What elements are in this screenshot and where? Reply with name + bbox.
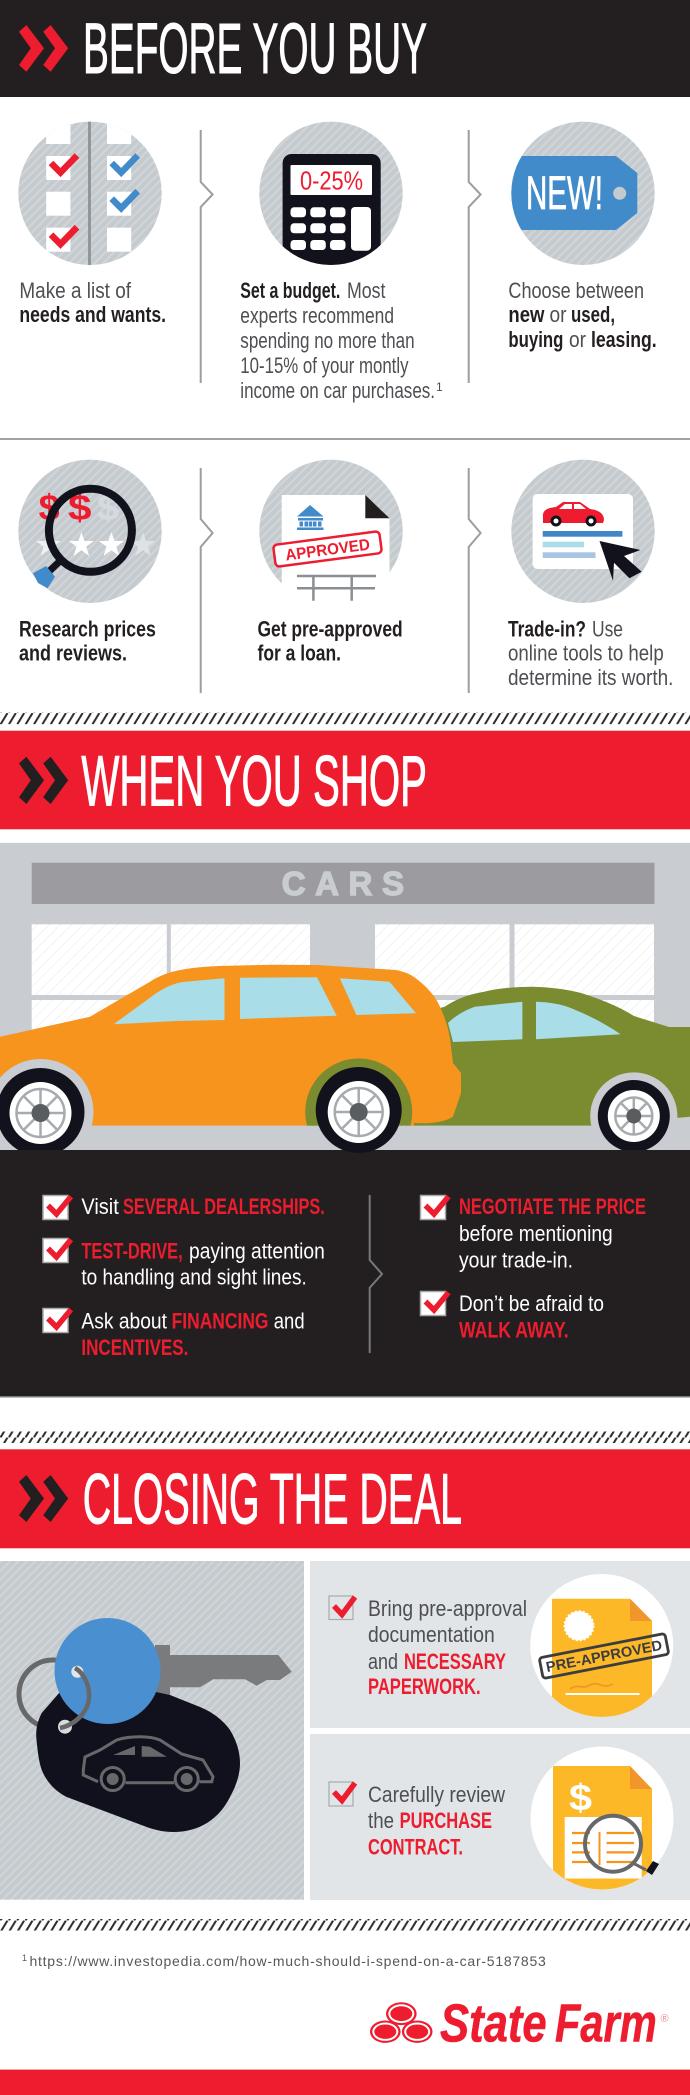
logo: state farm: Farm [555,1994,657,2054]
icon: magnifier with prices and stars: $ [68,487,92,528]
text: research prices: and reviews. [19,641,127,666]
icon: contract under magnifier [530,1746,674,1895]
text: set a budget: 1 [436,380,443,394]
text: make a list: Make a list of [19,278,132,303]
icon: key blade [155,1645,292,1697]
arrow divider 5 [370,1195,382,1353]
text: bring pre-approval: Bring pre-approval [368,1596,527,1621]
text: research prices: Research prices [19,617,156,642]
section header: before you buy [0,0,690,97]
logo: state farm: ® [660,2013,669,2025]
title: when you shop: WHEN YOU SHOP [81,742,427,822]
panel: set a budget [240,122,443,403]
text: carefully review [368,1782,505,1860]
text: set a budget: spending no more than [240,328,415,353]
icon: car outline on fob [83,1737,213,1790]
illustration: car dealership [0,843,690,1166]
panel: pre-approval documentation [310,1561,690,1728]
orange car [0,965,461,1126]
icon: pre-approved document [530,1574,673,1720]
logo: state farm [370,1994,669,2054]
text: trade-in [508,617,673,690]
green car [400,987,690,1126]
check: several dealerships: SEVERAL DEALERSHIPS. [123,1194,325,1219]
icon: pre-approved document: PRE-APPROVED [545,1638,664,1676]
check: walk away [420,1291,604,1343]
check: test-drive: paying attention [189,1238,325,1263]
panel: shopping checklist [0,1150,690,1398]
icon: online listing with cursor [511,460,655,603]
check: test-drive: to handling and sight lines. [81,1264,307,1289]
text: set a budget: Set a budget. [240,278,340,303]
text: pre-approved [258,617,403,666]
stamp: approved: APPROVED [284,537,371,564]
icon: red chevrons [19,25,68,72]
check: financing: FINANCING [172,1308,268,1333]
text: bring pre-approval: PAPERWORK. [368,1674,481,1699]
check: test-drive: TEST-DRIVE, [81,1238,183,1263]
text: carefully review: the [368,1808,394,1833]
icon: split ring back [19,1660,87,1728]
check: financing: Ask about [81,1308,167,1333]
text: choose: used, [571,302,615,327]
check: walk away: WALK AWAY. [459,1318,569,1343]
footer band [0,2070,690,2095]
text: choose: or [550,302,566,327]
icon: magnifier with prices and stars [18,460,162,603]
arrow divider 4 [469,468,481,693]
text: set a budget [240,278,443,403]
text: research prices [19,617,156,666]
check: walk away: Don’t be afraid to [459,1291,604,1316]
arrow divider 1 [201,130,213,383]
text: bring pre-approval [368,1596,527,1699]
text: bring pre-approval: NECESSARY [404,1649,506,1674]
check: bring paperwork [329,1596,355,1620]
text: pre-approved: Get pre-approved [258,617,403,642]
text: choose: or [569,327,586,352]
check: financing [43,1308,305,1360]
panel: research [18,460,162,666]
text: set a budget: experts recommend [240,303,394,328]
icon: new tag [505,122,655,265]
arrow divider 2 [469,130,481,383]
icon: new tag: NEW! [526,166,603,219]
icon: dark chevrons [19,757,68,804]
check: several dealerships [43,1194,325,1220]
icon: calculator: 0-25% [300,166,363,196]
text: carefully review: Carefully review [368,1782,505,1807]
text: trade-in: Trade-in? [508,617,586,642]
panel: purchase contract [310,1734,690,1900]
text: bring pre-approval: and [368,1649,398,1674]
check: test-drive [43,1238,325,1289]
icon: checklist [18,118,162,266]
panel: car keys illustration [0,1561,304,1900]
panel: trade-in [508,460,673,690]
text: set a budget: 10-15% of your montly [240,353,408,378]
section header: when you shop [0,731,690,829]
text: make a list [19,278,166,327]
check: review contract [329,1782,355,1806]
sign: cars: CARS [282,865,404,902]
icon: blue key head [54,1618,160,1724]
text: carefully review: PURCHASE [400,1808,492,1833]
icon: dark chevrons [19,1475,68,1522]
text: choose: buying [508,327,563,352]
showroom windows [32,924,654,1030]
wheel: orange car front [316,1067,402,1153]
text: choose: leasing. [591,327,657,352]
check: negotiate: your trade-in. [459,1248,573,1273]
panel: list of needs and wants [18,118,166,327]
text: set a budget: income on car purchases. [240,378,435,403]
text: bring pre-approval: documentation [368,1622,495,1647]
text: choose: Choose between [508,278,644,303]
check: negotiate [420,1194,646,1273]
text: make a list: needs and wants. [19,302,166,327]
text: choose: new [508,302,545,327]
icon: magnifier with prices and stars: $ [39,487,60,528]
text: carefully review: CONTRACT. [368,1834,463,1860]
icon: magnifier with prices and stars: $ [97,487,119,528]
sign: cars [32,863,654,904]
text: choose [508,278,657,352]
icon: bank [297,505,324,530]
icon: red car [543,502,604,526]
section header: closing the deal [0,1449,690,1548]
check: financing: INCENTIVES. [81,1335,188,1360]
check: financing: and [274,1308,305,1333]
icon: contract under magnifier: $ [569,1777,592,1818]
panel: new or used [505,122,657,352]
text: trade-in: Use [592,617,623,642]
footnote: 1 [22,1953,27,1963]
check: several dealerships: Visit [81,1194,119,1219]
footnote: https://www.investopedia.com/how-much-should-i-spend-on-a-car-5187853 [30,1953,546,1969]
icon: three ovals [370,2002,433,2043]
icon: approved document [259,460,403,606]
wheel: green car [598,1080,670,1152]
text: pre-approved: for a loan. [258,641,341,666]
icon: calculator [259,122,403,279]
check: negotiate: before mentioning [459,1221,613,1246]
stamp: approved [273,531,382,567]
panel: pre-approved loan [258,460,403,666]
text: set a budget: Most [347,278,386,303]
arrow divider 3 [201,468,213,693]
logo: state farm: State [440,1994,547,2054]
text: trade-in: online tools to help [508,641,664,666]
icon: black key fob [36,1680,240,1832]
wheel: orange car rear [0,1068,84,1156]
